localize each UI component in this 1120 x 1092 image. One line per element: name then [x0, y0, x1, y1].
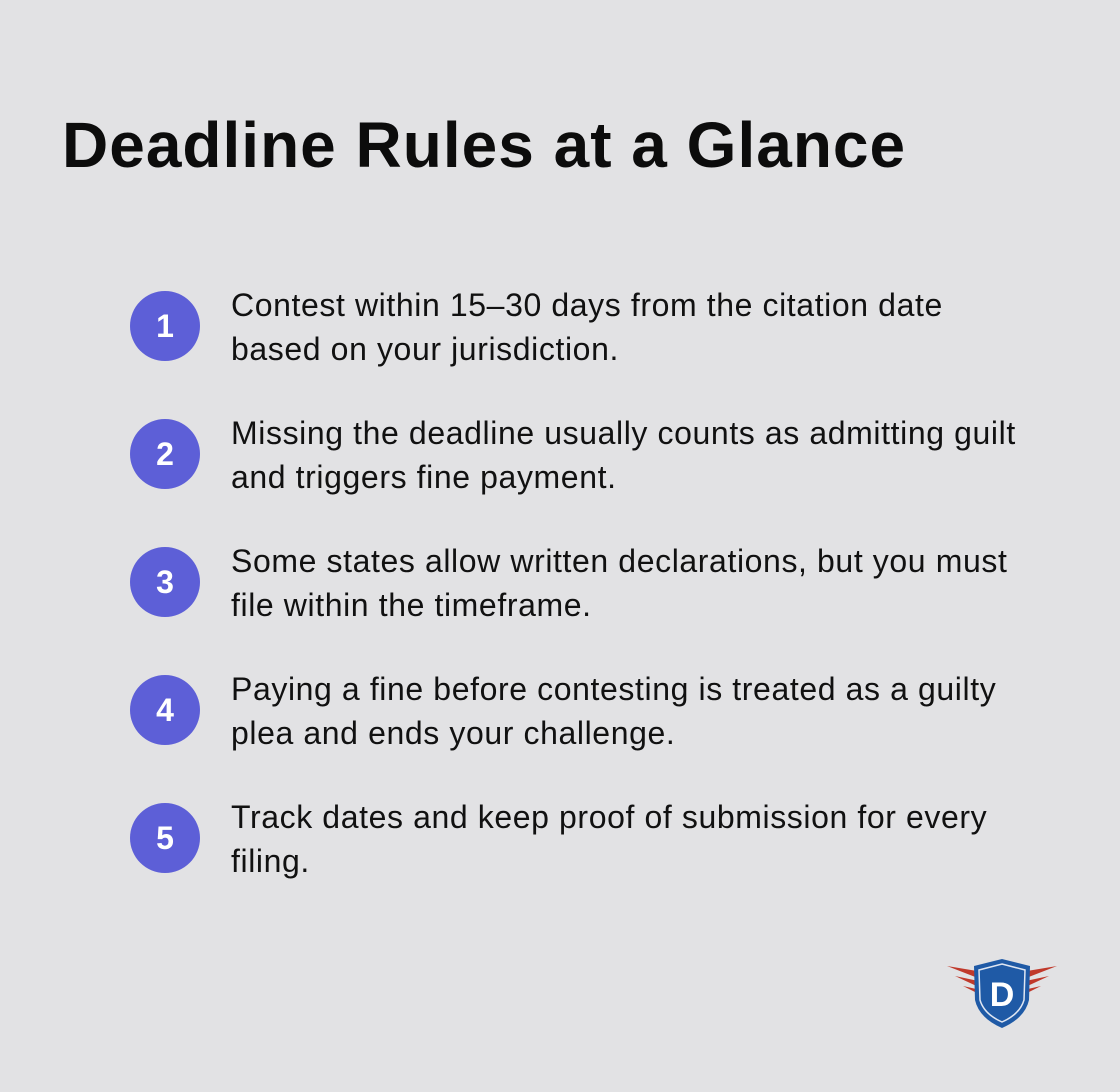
number 5 [130, 803, 200, 873]
text 1: based on your jurisdiction. [231, 331, 619, 367]
number 1 [130, 291, 200, 361]
text 3: Some states allow written declarations, but you must [231, 543, 1007, 579]
text 5: Track dates and keep proof of submission for every [231, 799, 987, 835]
number 3: 3 [156, 564, 174, 600]
item 4 [130, 671, 996, 751]
item 5 [130, 799, 987, 879]
icon: logo shield with wings: D [990, 976, 1014, 1014]
number 2: 2 [156, 436, 174, 472]
text 3: file within the timeframe. [231, 587, 592, 623]
item 3 [130, 543, 1007, 623]
text 2 [231, 415, 1016, 495]
number 4: 4 [156, 692, 174, 728]
text 2: Missing the deadline usually counts as admitting guilt [231, 415, 1016, 451]
item 2 [130, 415, 1016, 495]
number 3 [130, 547, 200, 617]
title: Deadline Rules at a Glance [62, 109, 906, 181]
number 4 [130, 675, 200, 745]
number 1: 1 [156, 308, 174, 344]
icon: logo shield with wings [947, 959, 1057, 1028]
text 1: Contest within 15–30 days from the citation date [231, 287, 943, 323]
text 1 [231, 287, 943, 367]
text 2: and triggers fine payment. [231, 459, 617, 495]
text 3 [231, 543, 1007, 623]
text 4: Paying a fine before contesting is treated as a guilty [231, 671, 996, 707]
number 2 [130, 419, 200, 489]
text 5 [231, 799, 987, 879]
text 4: plea and ends your challenge. [231, 715, 675, 751]
text 4 [231, 671, 996, 751]
item 1 [130, 287, 943, 367]
text 5: filing. [231, 843, 310, 879]
number 5: 5 [156, 820, 174, 856]
